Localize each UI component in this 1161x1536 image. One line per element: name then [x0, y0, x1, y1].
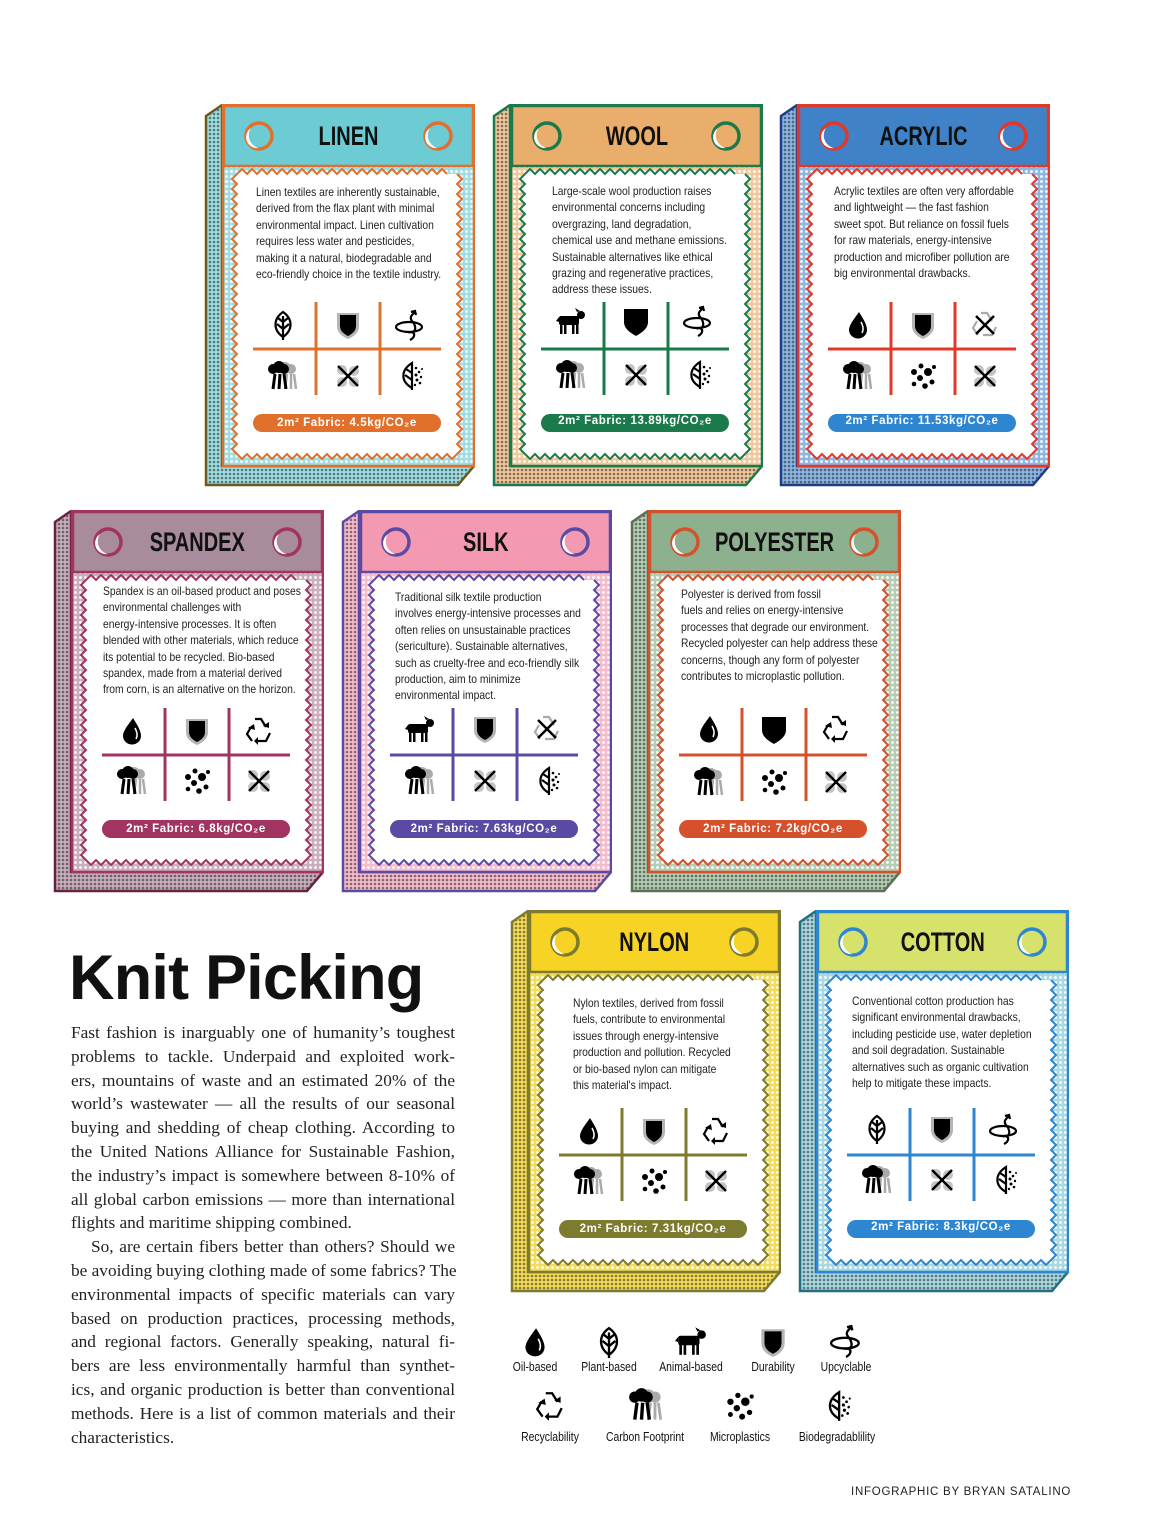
intro body text: the industry’s impact is somewhere between 8-10% of [71, 1166, 455, 1185]
wool description [552, 184, 727, 296]
acrylic description: sweet spot. But reliance on fossil fuels [834, 217, 1009, 231]
spandex title: SPANDEX [150, 527, 245, 557]
polyester description: Polyester is derived from fossil [681, 587, 821, 601]
spandex description: Spandex is an oil-based product and poses [103, 584, 301, 598]
card: linen [204, 104, 475, 486]
silk frame and icon grid [342, 510, 612, 892]
spandex footprint pill: 2m² Fabric: 6.8kg/CO₂e [126, 823, 266, 835]
silk description: Traditional silk textile production [395, 590, 541, 604]
intro body text: the United Nations Alliance for Sustainable Fashion, [71, 1142, 455, 1161]
nylon description: or bio-based nylon can mitigate [573, 1062, 716, 1076]
intro body text: based on production practices, processing methods, [71, 1309, 455, 1328]
linen title: LINEN [319, 121, 378, 151]
wool frame and icon grid [492, 104, 763, 486]
intro body text: be avoiding buying clothing made of some fabrics? The [71, 1261, 457, 1280]
linen description: eco-friendly choice in the textile industry. [256, 267, 441, 281]
intro body text: buying and shedding of cheap clothing. According to [71, 1118, 455, 1137]
wool description: Large-scale wool production raises [552, 184, 711, 198]
legend: Microplastics [710, 1429, 770, 1444]
acrylic title: ACRYLIC [879, 121, 968, 151]
card: cotton [798, 910, 1069, 1292]
silk description [395, 590, 581, 702]
polyester footprint pill: 2m² Fabric: 7.2kg/CO₂e [703, 823, 843, 835]
legend: Durability [751, 1359, 795, 1374]
polyester title: POLYESTER [715, 527, 834, 557]
acrylic description: production and microfiber pollution are [834, 250, 1010, 264]
acrylic description: and lightweight — the fast fashion [834, 200, 989, 214]
polyester frame and icon grid [630, 510, 901, 892]
acrylic description: Acrylic textiles are often very affordable [834, 184, 1014, 198]
intro body text [71, 1023, 457, 1447]
wool footprint pill: 2m² Fabric: 13.89kg/CO₂e [558, 415, 712, 427]
spandex description: its potential to be recycled. Bio-based [103, 650, 275, 664]
linen frame and icon grid [204, 104, 475, 486]
card: polyester [630, 510, 901, 892]
nylon frame and icon grid [510, 910, 781, 1292]
card: silk [342, 510, 612, 892]
nylon description: this material's impact. [573, 1078, 672, 1092]
legend: Recyclability [521, 1429, 579, 1444]
nylon description: production and pollution. Recycled [573, 1045, 731, 1059]
intro body text: problems to tackle. Underpaid and exploited work- [71, 1047, 455, 1066]
nylon description: Nylon textiles, derived from fossil [573, 996, 724, 1010]
silk description: (sericulture). Sustainable alternatives, [395, 639, 568, 653]
intro body text: environmental impacts of specific materials can vary [71, 1285, 455, 1304]
intro body text: flights and maritime shipping combined. [71, 1213, 352, 1232]
legend labels [513, 1359, 876, 1444]
intro body text: Fast fashion is inarguably one of humanity’s toughest [71, 1023, 455, 1042]
cotton title: COTTON [901, 927, 984, 957]
linen description [256, 185, 441, 281]
wool description: overgrazing, land degradation, [552, 217, 691, 231]
linen description: derived from the flax plant with minimal [256, 201, 434, 215]
legend [513, 1324, 876, 1444]
card: acrylic [780, 104, 1050, 486]
legend: Plant-based [581, 1359, 637, 1374]
silk description: production, aim to minimize [395, 672, 521, 686]
legend: Animal-based [659, 1359, 723, 1374]
intro body text: methods. Here is a list of common materials and their [71, 1404, 455, 1423]
legend: Biodegradablility [799, 1429, 875, 1444]
cotton description: help to mitigate these impacts. [852, 1076, 991, 1090]
nylon title: NYLON [620, 927, 689, 957]
linen description: requires less water and pesticides, [256, 234, 414, 248]
spandex description: energy-intensive processes. It is often [103, 617, 276, 631]
linen footprint pill: 2m² Fabric: 4.5kg/CO₂e [277, 417, 417, 429]
acrylic description: for raw materials, energy-intensive [834, 233, 992, 247]
polyester description: Recycled polyester can help address these [681, 636, 878, 650]
cotton description [852, 994, 1032, 1090]
legend: Upcyclable [821, 1359, 871, 1374]
wool description: grazing and regenerative practices, [552, 266, 713, 280]
intro body text: and regional factors. Generally speaking, natural fi- [71, 1332, 455, 1351]
silk description: often relies on unsustainable practices [395, 623, 571, 637]
cotton description: Conventional cotton production has [852, 994, 1014, 1008]
silk description: such as cruelty-free and eco-friendly silk [395, 656, 579, 670]
acrylic footprint pill: 2m² Fabric: 11.53kg/CO₂e [845, 415, 999, 427]
wool description: address these issues. [552, 282, 652, 296]
silk footprint pill: 2m² Fabric: 7.63kg/CO₂e [411, 823, 557, 835]
spandex description: from corn, is an alternative on the horizon. [103, 682, 296, 696]
intro body text: ics, and organic production is better than conventional [71, 1380, 455, 1399]
intro body text: characteristics. [71, 1428, 174, 1447]
acrylic frame and icon grid [780, 104, 1050, 486]
intro body text: So, are certain fibers better than others? Should we [91, 1237, 455, 1256]
cotton description: significant environmental drawbacks, [852, 1010, 1021, 1024]
wool description: chemical use and methane emissions. [552, 233, 727, 247]
polyester description: processes that degrade our environment. [681, 620, 869, 634]
cotton description: and soil degradation. Sustainable [852, 1043, 1005, 1057]
card: wool [492, 104, 763, 486]
silk description: environmental impact. [395, 688, 496, 702]
polyester description: contributes to microplastic pollution. [681, 669, 844, 683]
cotton frame and icon grid [798, 910, 1069, 1292]
cotton footprint pill: 2m² Fabric: 8.3kg/CO₂e [871, 1221, 1011, 1233]
polyester description: concerns, though any form of polyester [681, 653, 859, 667]
intro body text: bers are less environmentally harmful than synthet- [71, 1356, 455, 1375]
linen description: making it a natural, biodegradable and [256, 251, 432, 265]
intro body text: all global carbon emissions — more than international [71, 1190, 455, 1209]
linen description: Linen textiles are inherently sustainable, [256, 185, 440, 199]
main title: Knit Picking [69, 943, 423, 1013]
linen description: environmental impact. Linen cultivation [256, 218, 434, 232]
legend icons [525, 1324, 860, 1421]
silk title: SILK [463, 527, 508, 557]
nylon description: issues through energy-intensive [573, 1029, 719, 1043]
wool description: environmental concerns including [552, 200, 705, 214]
cotton description: including pesticide use, water depletion [852, 1027, 1032, 1041]
polyester description: fuels and relies on energy-intensive [681, 603, 843, 617]
spandex description: environmental challenges with [103, 600, 241, 614]
acrylic description [834, 184, 1014, 280]
spandex description: blended with other materials, which reduce [103, 633, 299, 647]
card: nylon [510, 910, 781, 1292]
credit: INFOGRAPHIC BY BRYAN SATALINO [851, 1486, 1071, 1498]
wool title: WOOL [605, 121, 668, 151]
card: spandex [54, 510, 324, 892]
nylon footprint pill: 2m² Fabric: 7.31kg/CO₂e [580, 1223, 726, 1235]
spandex frame and icon grid [54, 510, 324, 892]
spandex description [103, 584, 301, 696]
wool description: Sustainable alternatives like ethical [552, 250, 713, 264]
legend: Oil-based [513, 1359, 557, 1374]
silk description: involves energy-intensive processes and [395, 606, 581, 620]
spandex description: spandex, made from a material derived [103, 666, 282, 680]
intro body text: world’s wastewater — all the results of our seasonal [71, 1094, 455, 1113]
nylon description: fuels, contribute to environmental [573, 1012, 725, 1026]
intro body text: ers, mountains of waste and an estimated 20% of the [71, 1071, 455, 1090]
cotton description: alternatives such as organic cultivation [852, 1060, 1029, 1074]
acrylic description: big environmental drawbacks. [834, 266, 971, 280]
legend: Carbon Footprint [606, 1429, 684, 1444]
nylon description [573, 996, 731, 1092]
polyester description [681, 587, 878, 683]
